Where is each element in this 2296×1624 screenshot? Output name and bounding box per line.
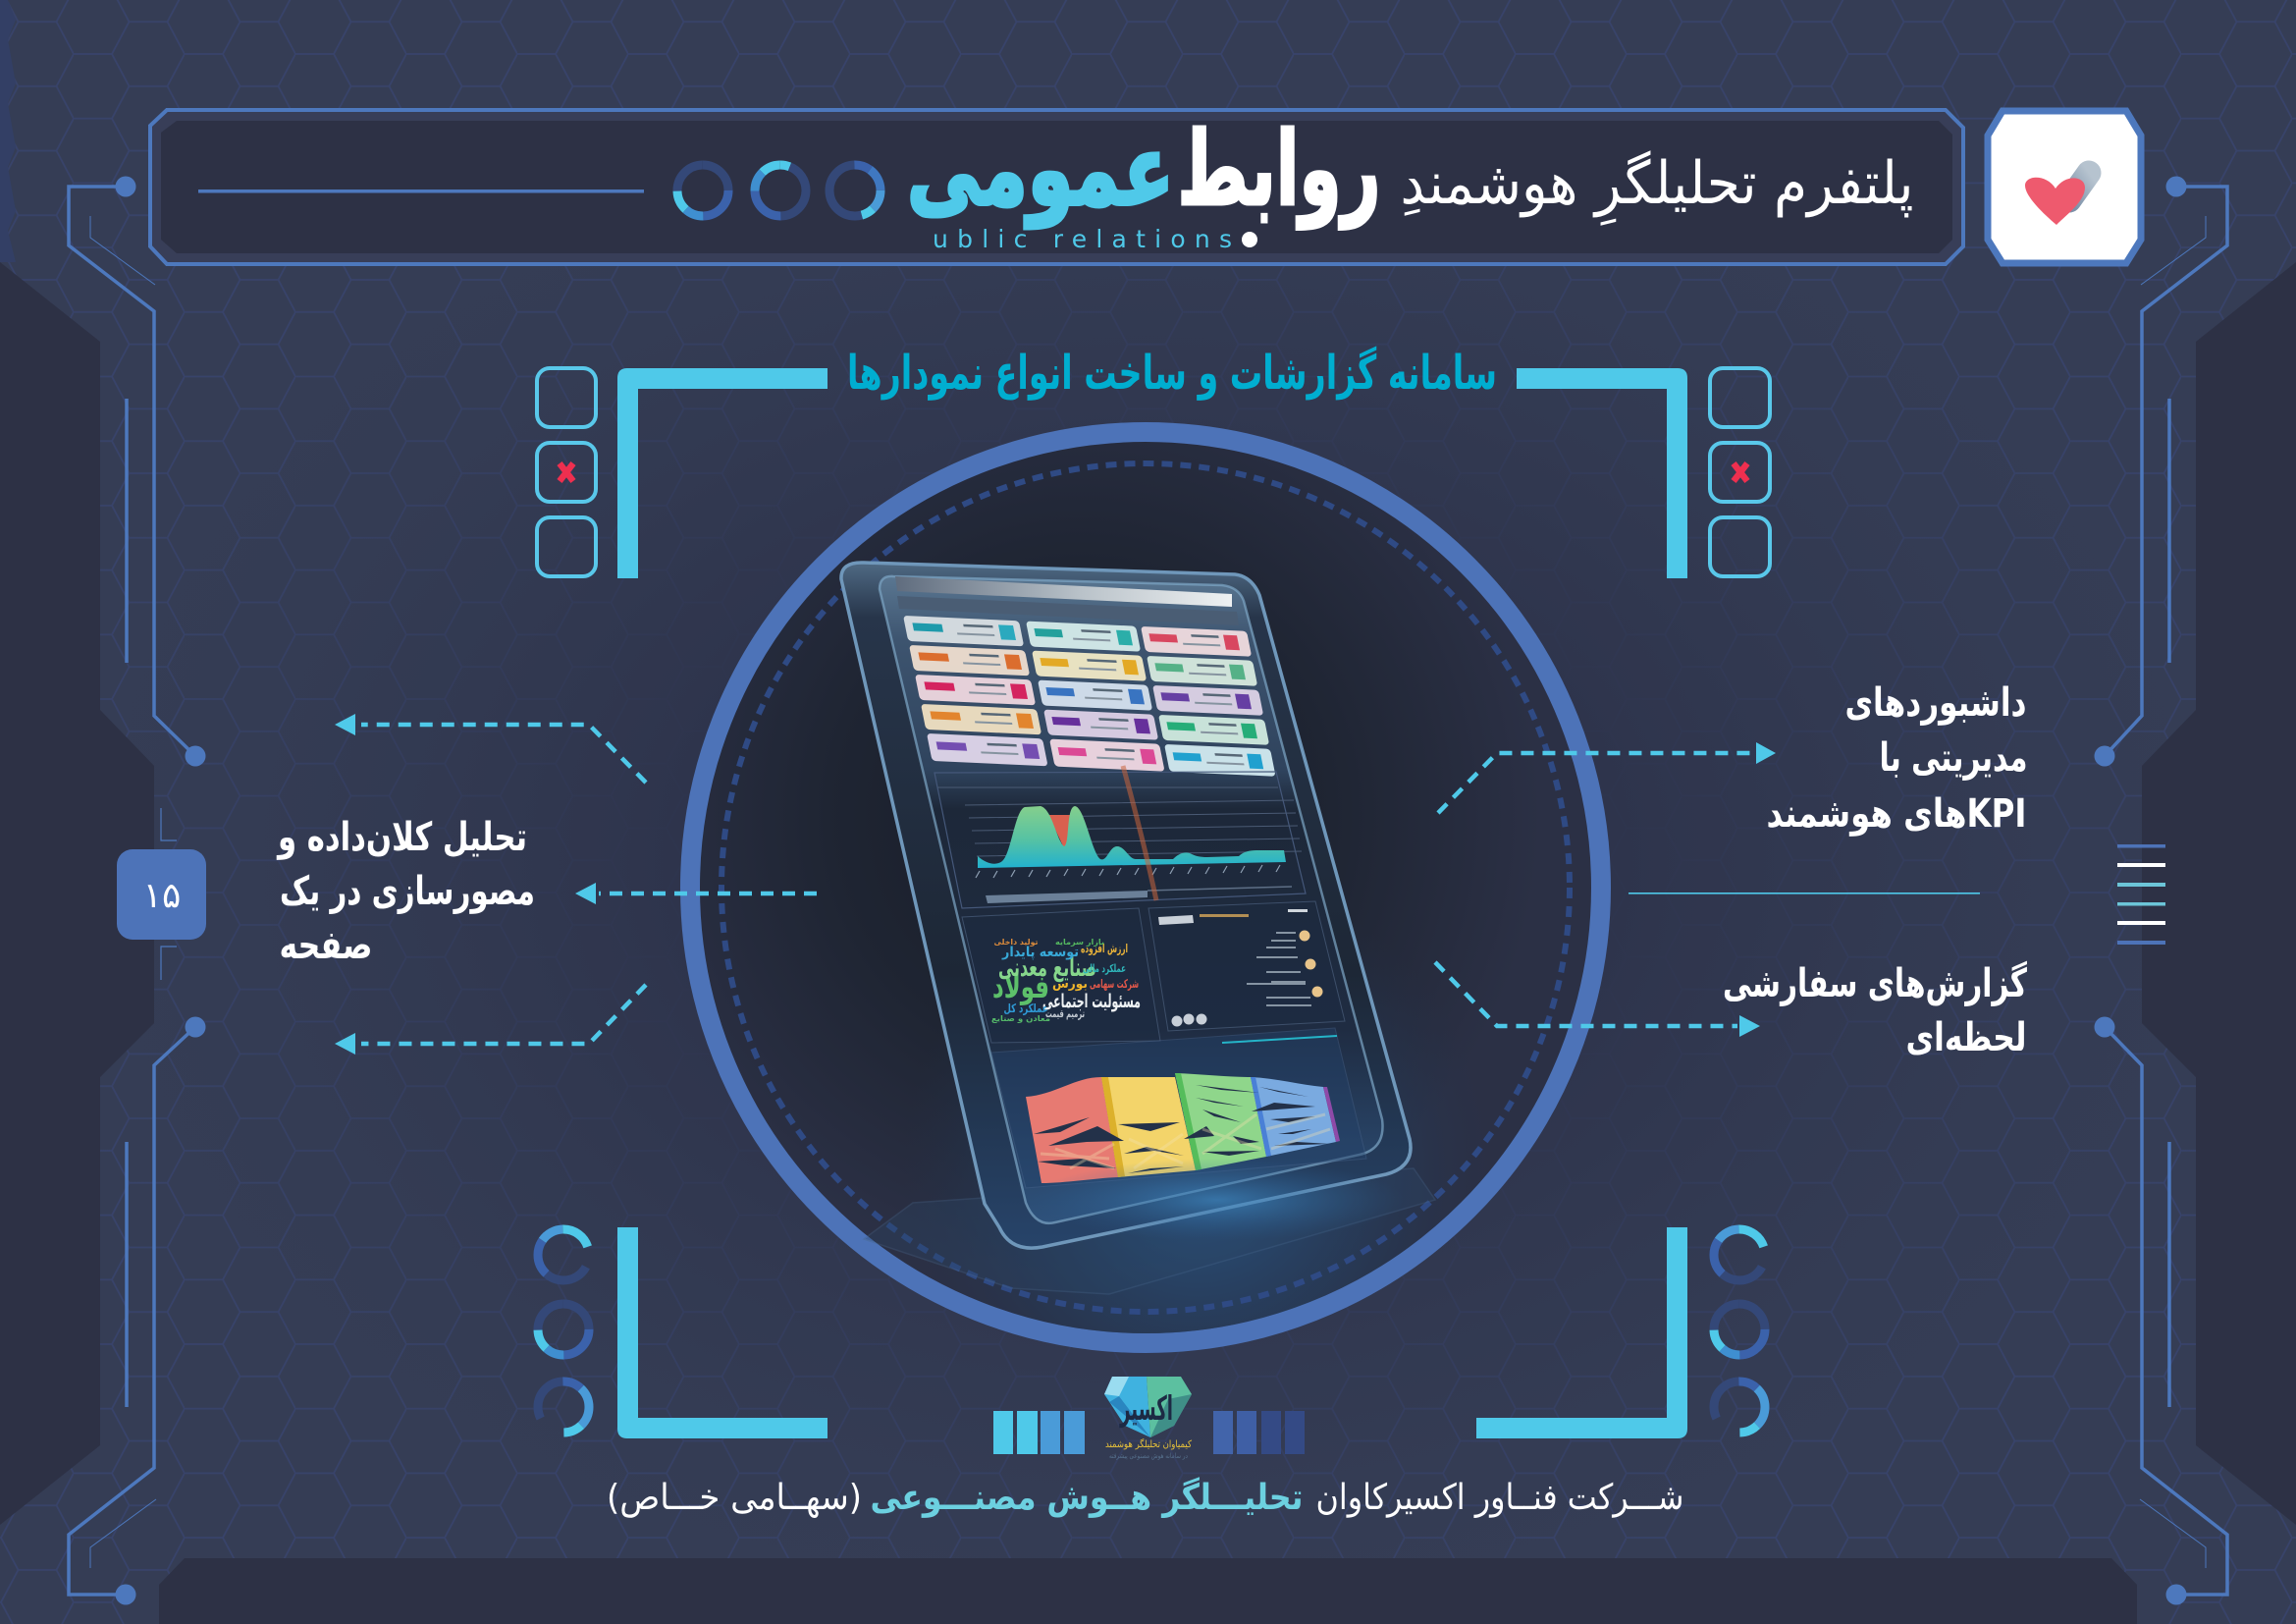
left text block: صفحه	[279, 923, 373, 968]
right text block: dashboards	[1767, 680, 2028, 837]
thin divider right	[1629, 893, 1980, 894]
word cloud: عملکرد کل	[1003, 1001, 1048, 1015]
header ring icons	[677, 165, 881, 216]
logo word: public: عمومی	[907, 113, 1174, 229]
footer bars right	[1213, 1411, 1305, 1454]
company logo gem	[1104, 1377, 1192, 1460]
footer company name: تحلیـــلگر هــوش مصنـــوعی	[870, 1477, 1304, 1518]
bottom-left dashed arrow	[335, 985, 646, 1055]
right text block: dashboards: KPIهای هوشمند	[1767, 791, 2026, 837]
word cloud: بازار سرمایه	[1055, 938, 1104, 947]
company logo gem: کیمیاوان تحلیلگر هوشمند	[1105, 1438, 1192, 1450]
right text block: dashboards: مدیریتی با	[1879, 735, 2028, 781]
bottom-right dashed arrow	[1435, 962, 1760, 1037]
word cloud: ترمیم قیمت	[1045, 1007, 1085, 1020]
footer company name: (سهــامی خـــاص)	[607, 1478, 862, 1518]
section heading: سامانه گزارشات و ساخت انواع نمودارها	[847, 346, 1497, 401]
left small boxes	[537, 368, 596, 576]
word cloud: فولاد	[992, 968, 1049, 1005]
word cloud: شرکت سهامی	[1090, 977, 1139, 991]
company logo gem: اکسیر	[1119, 1389, 1173, 1429]
footer company name: شـــرکت فنــاور اکسیرکاوان	[1315, 1478, 1684, 1518]
left bottom rings	[538, 1229, 589, 1433]
word cloud: معادن و صنایع	[991, 1014, 1050, 1023]
right text block: reports: لحظه‌ای	[1906, 1015, 2026, 1060]
word cloud: صنایع معدنی	[998, 953, 1096, 983]
right circuit lines	[2095, 177, 2227, 1604]
left text block: مصورسازی در یک	[280, 869, 535, 914]
right small boxes	[1710, 368, 1770, 576]
right text block: reports	[1723, 960, 2028, 1060]
header panel	[150, 109, 1963, 264]
left text block	[276, 815, 535, 968]
page number badge	[117, 849, 206, 940]
word cloud: مسئولیت اجتماعی	[1042, 991, 1141, 1012]
word cloud: تولید داخلی	[993, 938, 1039, 947]
logo dot	[1242, 232, 1257, 247]
word cloud: توسعه پایدار	[1001, 945, 1079, 960]
top-right dashed arrow	[1438, 742, 1776, 813]
word cloud	[962, 908, 1160, 1043]
left circuit lines	[69, 177, 206, 1604]
tablet mockup	[841, 563, 1435, 1294]
right bottom rings	[1714, 1229, 1765, 1433]
right text block: reports: گزارش‌های سفارشی	[1723, 960, 2028, 1006]
footer bars left	[993, 1411, 1085, 1454]
word cloud: عملکرد مالی	[1083, 962, 1126, 975]
middle-left dashed arrow	[575, 883, 817, 904]
tablet top bars	[895, 576, 1239, 625]
area chart	[934, 766, 1306, 908]
company logo gem: در سامانه هوش مصنوعی پیشرفته	[1109, 1452, 1188, 1460]
word cloud: بورس	[1052, 977, 1088, 992]
footer company name	[607, 1477, 1684, 1518]
right text block: dashboards: داشبوردهای	[1845, 680, 2026, 726]
word cloud: ارزش افزوده	[1081, 942, 1128, 956]
header divider line	[198, 189, 644, 192]
top-left dashed arrow	[335, 714, 646, 783]
side list panel	[1148, 901, 1345, 1031]
center circular panel	[690, 432, 1601, 1343]
header title: پلتفرم تحلیلگرِ هوشمندِ	[1400, 149, 1914, 227]
left text block: تحلیل کلان‌داده و	[276, 815, 527, 860]
logo subtitle: ublic relations	[933, 225, 1232, 253]
right tick lines	[2117, 844, 2165, 945]
sankey chart	[991, 1028, 1366, 1188]
logo word: relations: روابط	[1178, 109, 1380, 230]
page number badge: ۱۵	[143, 876, 181, 916]
dashboard cards	[903, 616, 1276, 777]
icon: heart check box	[1988, 111, 2141, 263]
frame brackets	[617, 368, 1687, 1438]
